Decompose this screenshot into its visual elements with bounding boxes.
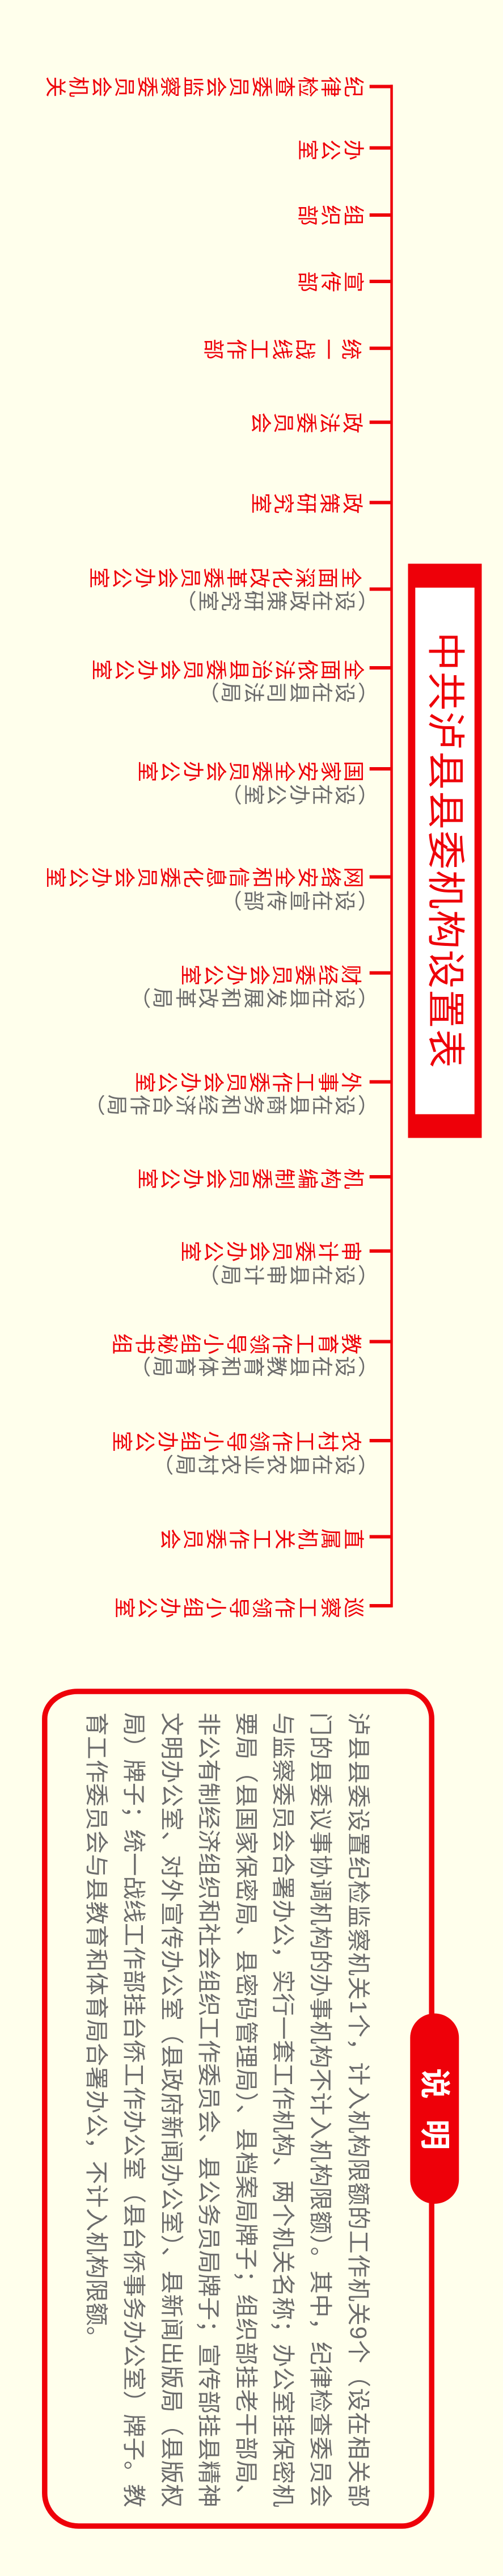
org tree trunk line [390, 85, 393, 1607]
label: 政策研究室: 政策研究室 [249, 490, 363, 513]
label: 办公室: 办公室 [296, 136, 365, 160]
label: 直属机关工作委员会: 直属机关工作委员会 [158, 1525, 365, 1549]
note: 设在县商务和经济合作局: （设在县商务和经济合作局） [82, 1092, 379, 1116]
note: 设在县农业农村局: （设在县农业农村局） [151, 1451, 379, 1475]
note line 2: 门的县委议事协调机构的办事机构不计入机构限额）。其中，纪律检查委员会 [307, 1712, 333, 2507]
title text: 中共泸县县委机构设置表 [424, 632, 467, 1069]
badge: 说明: 说明 [417, 2068, 451, 2170]
note line 6: 文明办公室、对外宣传办公室（县政府新闻办公室）、县新闻出版局（县版权 [159, 1712, 185, 2507]
label: 政法委员会: 政法委员会 [249, 409, 363, 433]
note: 设在县发展和改革局: （设在县发展和改革局） [128, 984, 379, 1009]
department labels [44, 73, 365, 1618]
note line 1: 泸县县委设置纪检监察机关1个，计入机构限额的工作机关9个（设在相关部 [345, 1712, 371, 2507]
panel: explanatory note border [45, 1691, 432, 2526]
paragraph: explanatory note text [83, 1712, 371, 2507]
note: 设在县教育和体育局: （设在县教育和体育局） [128, 1353, 379, 1377]
title panel [408, 564, 482, 1138]
org tree branch ticks [370, 85, 392, 1607]
note line 4: 要局（县国家保密局、县密码管理局）、县档案局牌子；组织部挂老干部局、 [233, 1712, 259, 2507]
host department notes [82, 587, 379, 1475]
label: 纪律检查委员会监察委员会机关: 纪律检查委员会监察委员会机关 [44, 73, 365, 96]
label: 外事工作委员会办公室: 外事工作委员会办公室 [133, 1069, 362, 1092]
label: 财经委员会办公室: 财经委员会办公室 [179, 961, 362, 985]
note line 3: 与监察委员会合署办公，实行一套工作机构、两个机关名称；办公室挂保密机 [270, 1712, 296, 2507]
note line 7: 局）牌子；统一战线工作部挂台侨工作办公室（县台侨事务办公室）牌子。教 [121, 1712, 147, 2507]
note line 8: 育工作委员会与县教育和体育局合署办公，不计入机构限额。 [83, 1712, 109, 2350]
label: 统一战线工作部: 统一战线工作部 [202, 336, 362, 359]
label: 机构编制委员会办公室: 机构编制委员会办公室 [136, 1165, 365, 1189]
note: 设在县审计局: （设在县审计局） [196, 1261, 379, 1286]
label: 审计委员会办公室: 审计委员会办公室 [179, 1238, 362, 1261]
note: 设在县司法局: （设在县司法局） [196, 679, 379, 703]
note line 5: 非公有制经济组织和社会组织工作委员会、县公务员局牌子；宣传部挂县精神 [196, 1712, 222, 2507]
label: 组织部: 组织部 [296, 202, 365, 225]
badge: 说明 [410, 2013, 459, 2204]
label: 教育工作领导小组秘书组: 教育工作领导小组秘书组 [110, 1330, 362, 1354]
label: 全面深化改革委员会办公室: 全面深化改革委员会办公室 [87, 564, 362, 588]
note: 设在政策研究室: （设在政策研究室） [174, 587, 379, 612]
label: 网络安全和信息化委员会办公室: 网络安全和信息化委员会办公室 [44, 864, 365, 888]
label: 全面依法治县委员会办公室: 全面依法治县委员会办公室 [90, 656, 365, 680]
label: 国家安全委员会办公室: 国家安全委员会办公室 [136, 758, 365, 782]
label: 农村工作领导小组办公室: 农村工作领导小组办公室 [110, 1428, 362, 1451]
note: 设在办公室: （设在办公室） [219, 781, 379, 805]
label: 宣传部: 宣传部 [296, 268, 365, 292]
label: 巡察工作领导小组办公室: 巡察工作领导小组办公室 [113, 1594, 365, 1618]
note: 设在宣传部: （设在宣传部） [219, 887, 379, 911]
